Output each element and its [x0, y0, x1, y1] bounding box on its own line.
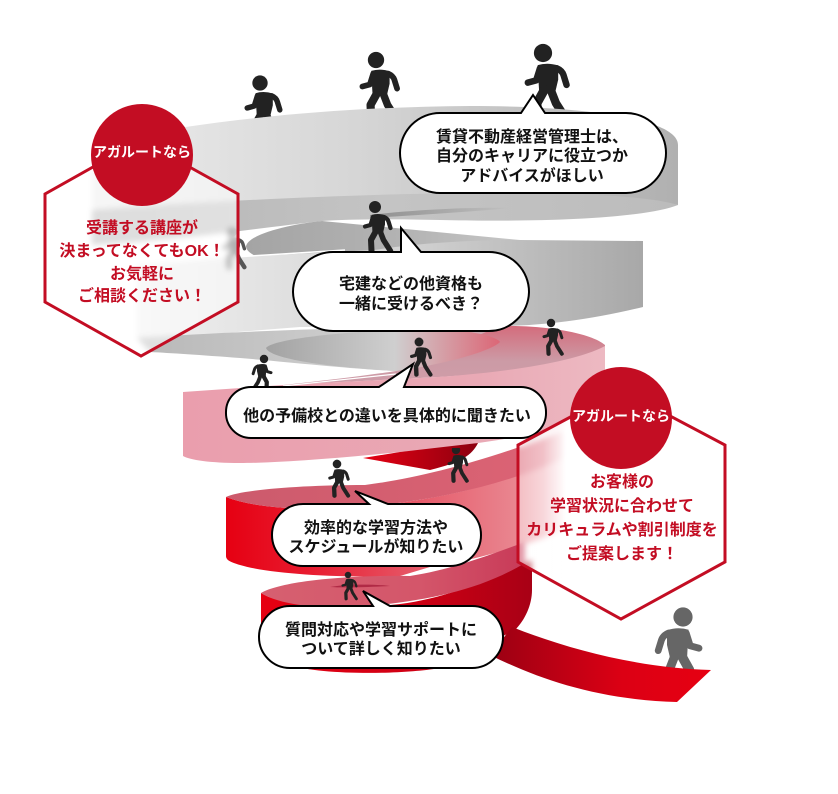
ribbon 1 gray	[92, 106, 678, 245]
walker 11	[343, 572, 356, 599]
panel backdrop: right hexagon	[520, 419, 571, 570]
speech bubble 5: ついて詳しく知りたい	[301, 639, 461, 658]
speech bubble 1: 賃貸不動産経営管理士は、	[436, 127, 628, 146]
callout: left hexagon: お気軽に	[110, 264, 174, 283]
speech bubble 4	[272, 491, 481, 566]
gray walker	[658, 607, 699, 687]
callout: left hexagon	[45, 104, 238, 356]
ribbon 4 red	[226, 430, 565, 577]
ribbon tail	[490, 627, 711, 702]
speech bubble 5: 質問対応や学習サポートに	[285, 620, 477, 639]
speech bubble 3	[226, 364, 546, 438]
speech bubble 2: 宅建などの他資格も	[339, 274, 483, 293]
callout: right hexagon: お客様の	[590, 472, 654, 491]
speech bubble 4: スケジュールが知りたい	[289, 537, 463, 556]
callout: left hexagon: 決まってなくてもOK！	[59, 242, 225, 260]
speech bubble 3: 他の予備校との違いを具体的に聞きたい	[243, 406, 531, 425]
walker 1	[247, 75, 280, 139]
walker 3	[528, 44, 567, 120]
callout: right hexagon: カリキュラムや割引制度を	[526, 520, 718, 539]
walker 2	[362, 52, 397, 120]
walker 10	[449, 446, 467, 481]
speech bubble 2: 一緒に受けるべき？	[339, 294, 483, 313]
speech bubble 5	[259, 591, 503, 668]
panel backdrop: left hexagon	[90, 169, 236, 351]
ribbon 2 gray	[137, 221, 643, 340]
walker 5 behind panel	[224, 227, 244, 267]
callout: right hexagon: 学習状況に合わせて	[550, 496, 694, 515]
ribbon 3 pink	[137, 326, 605, 470]
spiral artwork	[90, 44, 711, 702]
callout: right hexagon: ご提案します！	[566, 544, 678, 563]
callout: right hexagon: アガルートなら	[572, 408, 670, 424]
ribbon 5 red	[261, 542, 532, 673]
callout: right hexagon	[518, 367, 725, 619]
walker 6	[253, 355, 271, 390]
speech bubble 2	[293, 228, 529, 331]
speech bubble 1: アドバイスがほしい	[460, 166, 604, 185]
callout: left hexagon: アガルートなら	[93, 144, 191, 160]
walker 7	[412, 338, 430, 375]
walker 9	[330, 460, 348, 496]
callout: left hexagon: 受講する講座が	[86, 218, 198, 237]
speech bubble 1: 自分のキャリアに役立つか	[436, 146, 628, 165]
speech bubble 4: 効率的な学習方法や	[304, 518, 448, 537]
walker 8	[544, 319, 562, 354]
walker 4	[365, 201, 390, 251]
callout: left hexagon: ご相談ください！	[78, 286, 206, 305]
speech bubble 1	[400, 95, 666, 193]
